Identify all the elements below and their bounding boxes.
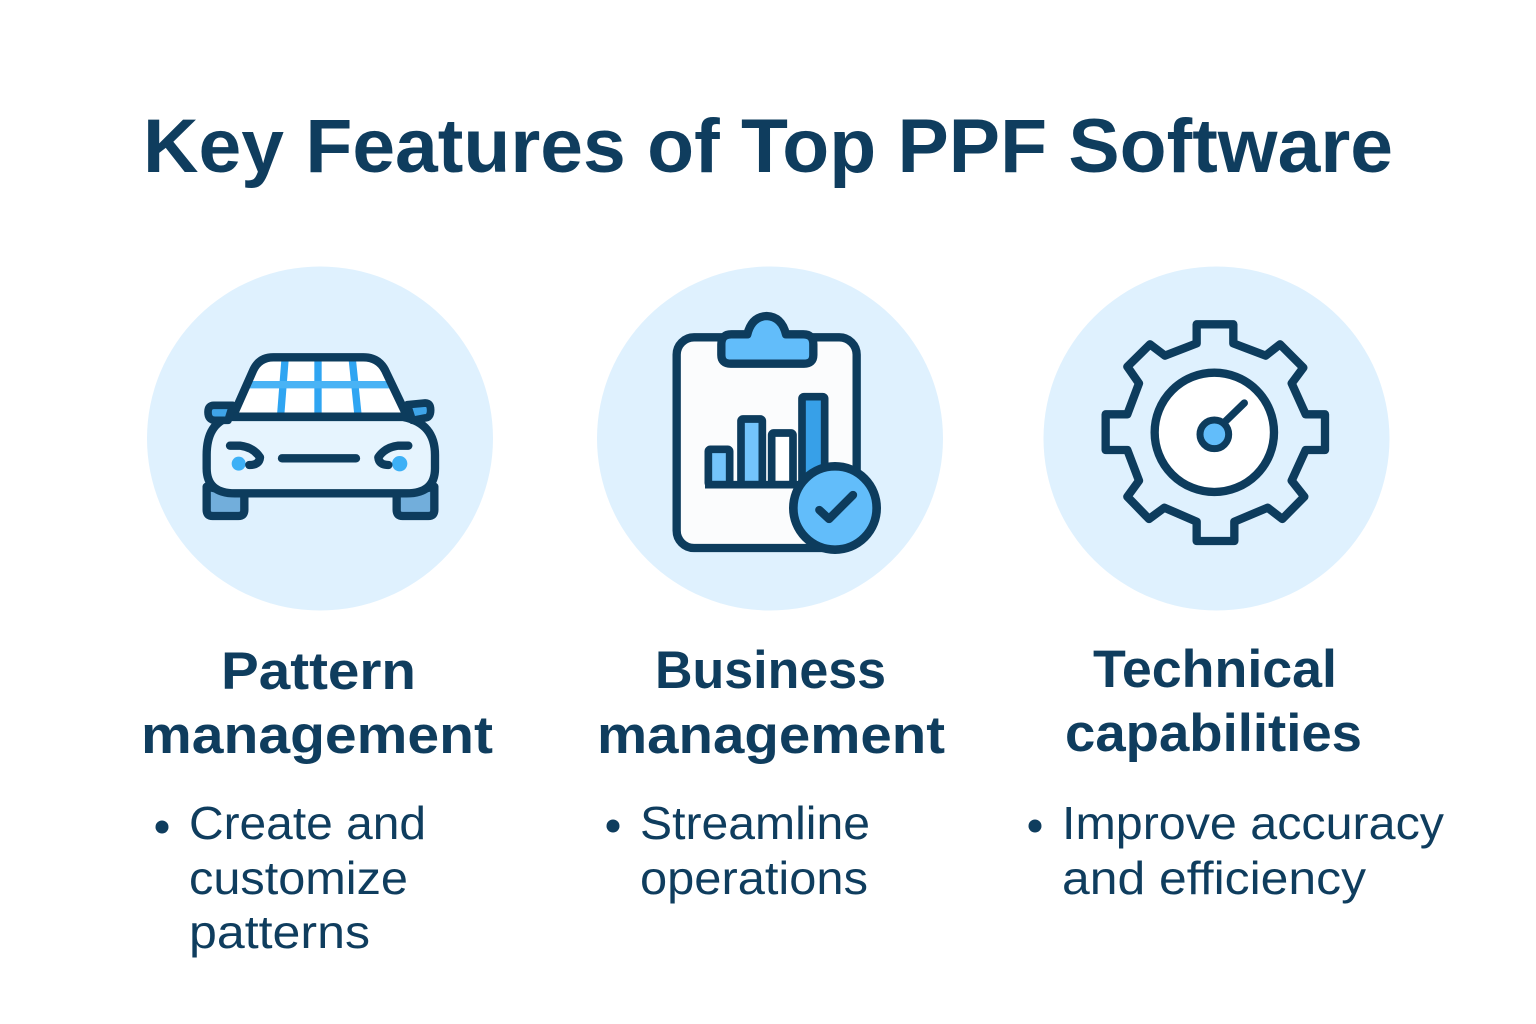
bullet list: pattern: Create and (189, 797, 426, 849)
grille (282, 446, 356, 471)
bar 1 (708, 449, 730, 485)
check badge (793, 466, 877, 550)
bullet list: pattern: customize (189, 852, 408, 904)
clipboard clip (721, 316, 813, 364)
title: Key Features of Top PPF Software (143, 104, 1393, 189)
bullet list: business: operations (640, 852, 868, 904)
heading: technical capabilities (1065, 640, 1362, 763)
gauge needle (1223, 403, 1244, 423)
bullet list: technical (1028, 797, 1445, 904)
windshield (233, 357, 407, 417)
bullet list: technical: Improve accuracy (1062, 797, 1445, 849)
car body (207, 417, 435, 493)
heading: pattern management: management (141, 706, 493, 765)
bullet list: business (606, 797, 870, 904)
icon: gear with gauge (1106, 324, 1325, 541)
heading: pattern management: Pattern (221, 642, 416, 701)
heading: business management: Business (655, 641, 886, 700)
gear outline (1106, 324, 1325, 541)
icon: car with film pattern (207, 357, 435, 516)
left mirror (208, 405, 233, 420)
heading: business management: management (597, 706, 945, 765)
panel: technical capabilities (1028, 266, 1445, 904)
bullet list: technical: and efficiency (1062, 852, 1367, 904)
check mark (819, 495, 853, 519)
panel: pattern management (141, 266, 493, 958)
left wheel (207, 487, 244, 516)
gauge hub (1200, 420, 1229, 449)
bar 3 (772, 433, 793, 485)
panel: business management (597, 266, 945, 904)
heading: pattern management (141, 642, 493, 765)
right mirror (407, 403, 431, 420)
icon: clipboard with chart and check (677, 316, 877, 550)
bullet list: pattern: patterns (189, 906, 370, 958)
chart baseline (705, 473, 827, 496)
icon background circle: pattern (147, 266, 493, 610)
clipboard board (677, 337, 857, 548)
windshield pattern grid (247, 360, 392, 415)
icon background circle: business (597, 266, 943, 610)
left headlight (232, 457, 246, 471)
heading: technical capabilities: Technical (1093, 640, 1337, 699)
bar 2 (741, 419, 762, 485)
right headlight (392, 456, 407, 471)
icon background circle: technical (1044, 266, 1390, 610)
heading: business management (597, 641, 945, 765)
bullet list: pattern (156, 797, 426, 958)
bar 4 (802, 397, 825, 485)
gauge dial (1155, 373, 1274, 492)
right wheel (397, 487, 434, 516)
bullet list: business: Streamline (640, 797, 870, 849)
heading: technical capabilities: capabilities (1065, 704, 1362, 763)
